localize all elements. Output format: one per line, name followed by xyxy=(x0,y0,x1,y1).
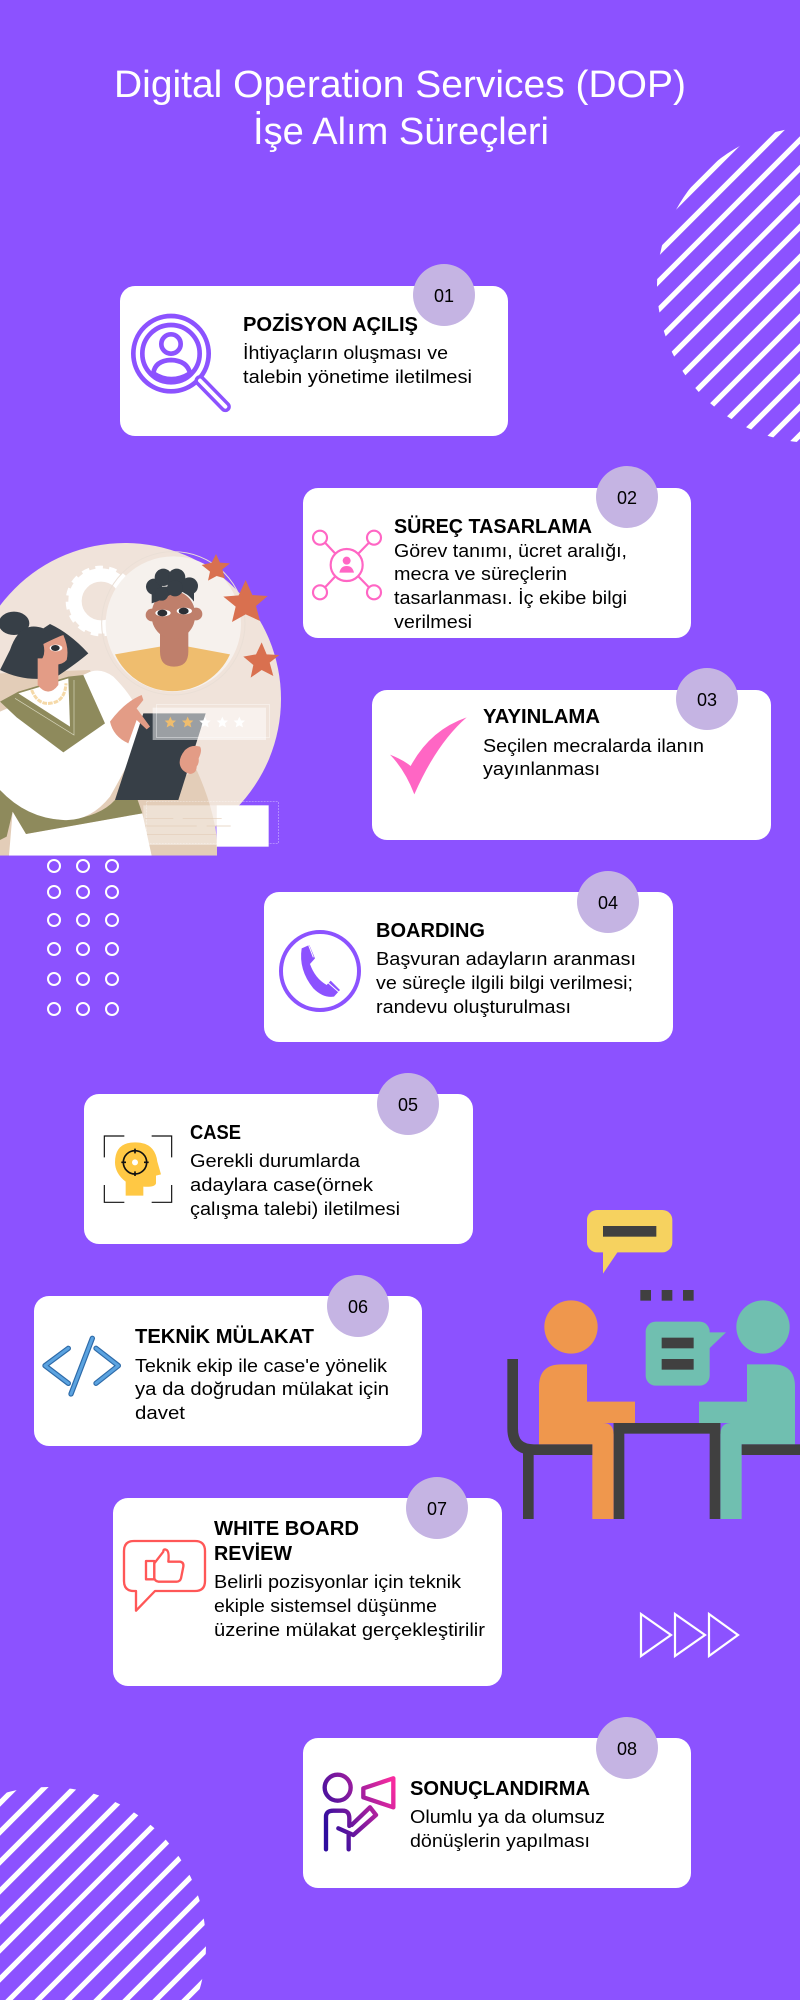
panel: step 08 xyxy=(303,1717,691,1888)
panel: step 02 xyxy=(303,466,691,638)
panel: step 02: 02 xyxy=(617,488,637,508)
panel: step 06: Teknik ekip ile case'e yönelik xyxy=(135,1356,388,1376)
panel: step 06: davet xyxy=(135,1403,185,1423)
panel: step 02: mecra ve süreçlerin xyxy=(394,564,567,584)
panel: step 07: üzerine mülakat gerçekleştirilir xyxy=(214,1620,485,1640)
panel: step 07: 07 xyxy=(427,1499,447,1519)
panel: step 05: CASE xyxy=(190,1122,241,1144)
title xyxy=(114,64,686,153)
panel: step 02: Görev tanımı, ücret aralığı, xyxy=(394,541,627,561)
panel: step 01: İhtiyaçların oluşması ve xyxy=(243,343,448,363)
panel: step 08: dönüşlerin yapılması xyxy=(410,1831,590,1851)
title: İşe Alım Süreçleri xyxy=(253,110,549,153)
panel: step 07 xyxy=(113,1477,502,1686)
panel: step 06 xyxy=(34,1275,422,1446)
icon: head with target xyxy=(104,1136,172,1202)
panel: step 01 xyxy=(120,264,508,436)
panel: step 04: 04 xyxy=(598,893,618,913)
panel: step 07: ekiple sistemsel düşünme xyxy=(214,1596,437,1616)
striped circle: bottom left xyxy=(0,1787,206,2000)
panel: step 04: Başvuran adayların aranması xyxy=(376,949,636,969)
decorative dot grid xyxy=(48,860,118,1015)
panel: step 01: 01 xyxy=(434,286,454,306)
striped circle: top right xyxy=(657,130,800,442)
panel: step 04 xyxy=(264,871,673,1042)
panel: step 06: ya da doğrudan mülakat için xyxy=(135,1379,389,1399)
panel: step 05 xyxy=(84,1073,473,1244)
panel: step 05: Gerekli durumlarda xyxy=(190,1151,361,1171)
panel: step 03: YAYINLAMA xyxy=(483,706,600,728)
icon: phone xyxy=(281,932,359,1010)
icon: code brackets xyxy=(45,1338,118,1394)
icon: network with person xyxy=(313,531,381,599)
icon: thumbs up speech bubble xyxy=(124,1541,205,1611)
panel: step 08: Olumlu ya da olumsuz xyxy=(410,1807,605,1827)
illustration: woman reviewing candidate xyxy=(0,543,281,856)
panel: step 05: adaylara case(örnek xyxy=(190,1175,374,1195)
panel: step 08: 08 xyxy=(617,1739,637,1759)
panel: step 07: WHITE BOARD xyxy=(214,1518,359,1540)
panel: step 03: Seçilen mecralarda ilanın xyxy=(483,736,704,756)
panel: step 04: BOARDING xyxy=(376,920,485,942)
panel: step 07: Belirli pozisyonlar için teknik xyxy=(214,1572,462,1592)
illustration: two people talking at a table xyxy=(513,1210,800,1519)
title: Digital Operation Services (DOP) xyxy=(114,64,686,106)
panel: step 06: TEKNİK MÜLAKAT xyxy=(135,1325,314,1348)
panel: step 03: yayınlanması xyxy=(483,759,600,779)
panel: step 05: 05 xyxy=(398,1095,418,1115)
panel: step 04: randevu oluşturulması xyxy=(376,997,571,1017)
panel: step 05: çalışma talebi) iletilmesi xyxy=(190,1199,400,1219)
panel: step 07: REVİEW xyxy=(214,1542,292,1565)
panel: step 02: tasarlanması. İç ekibe bilgi xyxy=(394,588,627,608)
icon: check mark xyxy=(390,717,467,794)
panel: step 01: talebin yönetime iletilmesi xyxy=(243,367,472,387)
panel: step 06: 06 xyxy=(348,1297,368,1317)
panel: step 02: SÜREÇ TASARLAMA xyxy=(394,515,592,538)
panel: step 01: POZİSYON AÇILIŞ xyxy=(243,313,418,336)
icon: person with megaphone xyxy=(325,1775,393,1849)
icon: magnifier with person xyxy=(133,316,225,407)
panel: step 08: SONUÇLANDIRMA xyxy=(410,1778,590,1800)
panel: step 03 xyxy=(372,668,771,840)
panel: step 02: verilmesi xyxy=(394,612,472,632)
panel: step 04: ve süreçle ilgili bilgi verilmesi; xyxy=(376,973,633,993)
icon: three outlined triangles xyxy=(641,1614,738,1656)
panel: step 03: 03 xyxy=(697,690,717,710)
